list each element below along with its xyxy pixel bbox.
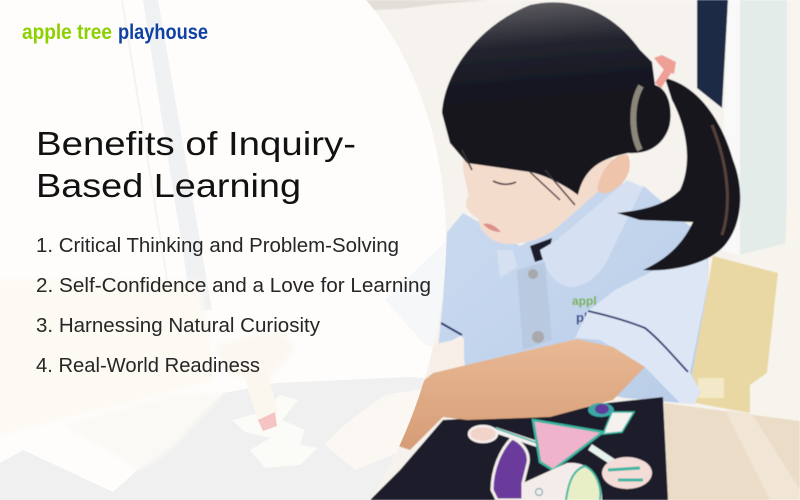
face (463, 150, 620, 244)
table highlight (725, 410, 800, 500)
title: Benefits of Inquiry- (36, 125, 356, 162)
arm (395, 339, 645, 450)
shirt body (438, 180, 708, 404)
hair wisps (462, 150, 575, 205)
logo: apple tree (22, 21, 112, 44)
button placket (517, 262, 552, 350)
wooden table (664, 403, 800, 500)
window frame (720, 0, 740, 255)
benefit 1: 1. Critical Thinking and Problem-Solving (36, 235, 399, 257)
left sleeve piping (441, 323, 462, 335)
logo (22, 21, 208, 44)
faded left hand (218, 332, 292, 376)
shirt sleeve (575, 255, 708, 404)
faded thin curtain line (121, 0, 168, 278)
black paper (370, 397, 668, 500)
head (523, 463, 602, 500)
purple leg (492, 438, 528, 500)
ear (597, 155, 630, 194)
ponytail highlight (712, 125, 727, 235)
benefits list (36, 235, 431, 377)
hair (442, 2, 671, 195)
window pane (740, 0, 795, 255)
faded photo inside panel (0, 0, 450, 500)
top ledge (360, 0, 490, 10)
faded hand (326, 389, 422, 470)
right wall strip (787, 0, 800, 420)
pink body (533, 420, 603, 470)
sleeve piping (588, 311, 688, 372)
faded cutout (232, 395, 318, 468)
faded sleeve (385, 240, 447, 350)
benefit 4: 4. Real-World Readiness (36, 355, 260, 377)
left collar (497, 250, 517, 278)
faded floor tint (0, 280, 215, 440)
right collar (540, 180, 643, 287)
title (36, 125, 356, 204)
ponytail (617, 78, 740, 270)
right arm (590, 447, 625, 470)
hair streak (633, 86, 641, 150)
shirt logo (572, 294, 597, 325)
logo: playhouse (118, 21, 208, 44)
wall below window (740, 240, 800, 420)
faded black paper (0, 377, 450, 500)
white curved text panel (0, 0, 446, 500)
shirt logo: pl (576, 310, 588, 325)
pink hair tie (654, 55, 676, 88)
chair gap (698, 378, 724, 398)
faded glue stick (246, 379, 278, 431)
left hand (469, 426, 497, 442)
faded curtain band (143, 0, 212, 310)
window blind (697, 0, 728, 108)
neck shadow (530, 238, 552, 262)
child's drawing on black paper (469, 403, 652, 500)
right hand (602, 457, 652, 489)
left arm line (495, 430, 540, 445)
shirt buttons (528, 269, 544, 343)
shirt logo: appl (572, 294, 597, 308)
benefit 3: 3. Harnessing Natural Curiosity (36, 315, 320, 337)
face details (483, 181, 516, 232)
flower (588, 403, 614, 417)
benefit 2: 2. Self-Confidence and a Love for Learning (36, 275, 431, 297)
top right arm (603, 412, 634, 434)
yellow chair (692, 256, 778, 413)
cream gap under arm (430, 338, 464, 372)
title: Based Learning (36, 167, 301, 204)
faded white papers (142, 402, 214, 466)
